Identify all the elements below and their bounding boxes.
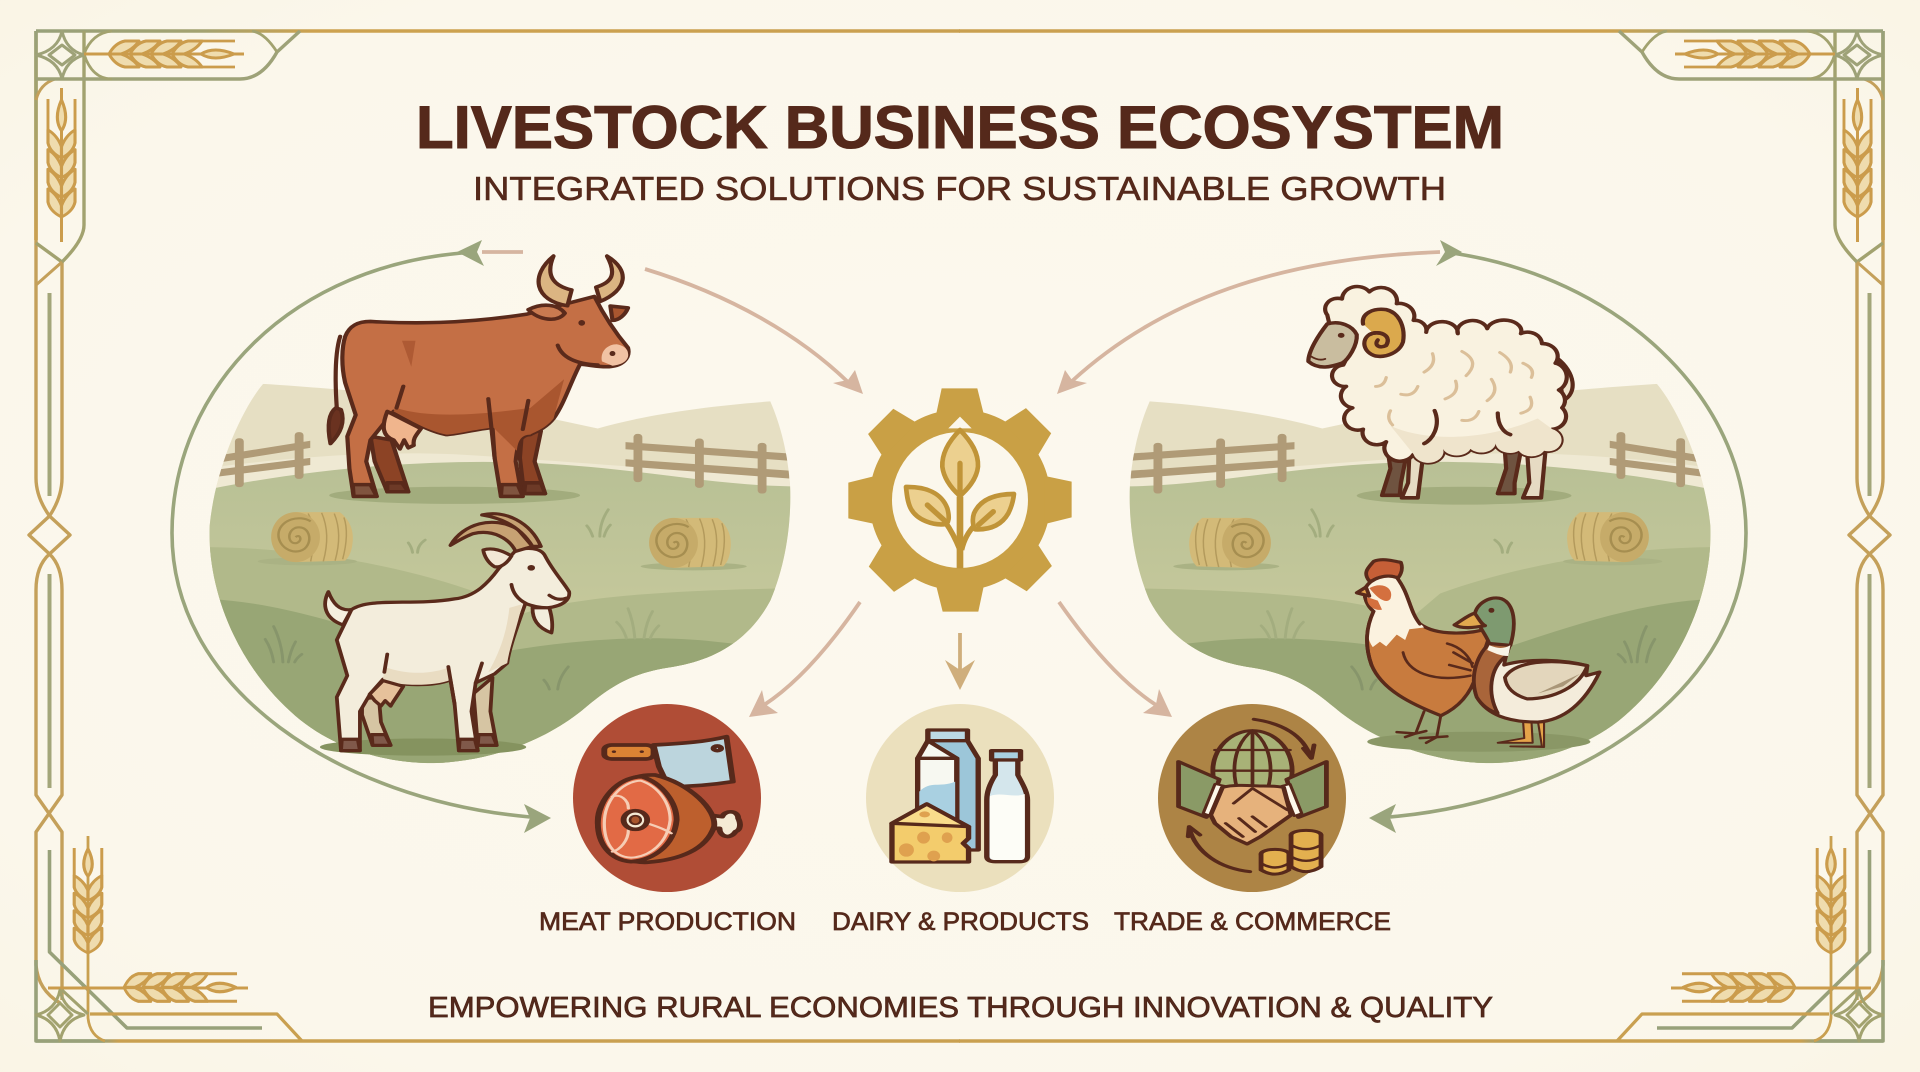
- label: meat production: MEAT PRODUCTION: [539, 908, 796, 936]
- arrow: hub to dairy: [945, 633, 975, 690]
- icon: meat production: [573, 704, 761, 892]
- panel: left pasture landscape: [202, 379, 800, 769]
- arrow: hub to sheep pasture: [1057, 252, 1440, 394]
- icon: cow: [329, 256, 629, 504]
- icon: goat: [320, 514, 569, 756]
- ornamental border: left half: [29, 31, 960, 1041]
- icon: dairy products: [866, 704, 1054, 892]
- arrow: short pink link to left loop: [482, 250, 523, 254]
- footer tagline: EMPOWERING RURAL ECONOMIES THROUGH INNOVATION & QUALITY: [428, 992, 1493, 1024]
- ornamental border: right half: [959, 31, 1890, 1041]
- arrow: hub to meat: [749, 602, 860, 717]
- arrow: cow pasture to hub: [645, 269, 863, 394]
- arrow: left green loop: [172, 240, 551, 833]
- icon: trade and commerce: [1158, 704, 1346, 892]
- subtitle: INTEGRATED SOLUTIONS FOR SUSTAINABLE GROWTH: [473, 170, 1446, 207]
- icon: duck: [1454, 598, 1600, 747]
- icon: central gear with sprout: [848, 388, 1072, 612]
- label: trade and commerce: TRADE & COMMERCE: [1114, 908, 1391, 936]
- label: dairy and products: DAIRY & PRODUCTS: [832, 908, 1089, 936]
- icon: sheep: [1308, 287, 1573, 505]
- arrow: right green loop: [1369, 240, 1746, 833]
- panel: right pasture landscape: [1120, 379, 1718, 769]
- title: LIVESTOCK BUSINESS ECOSYSTEM: [416, 94, 1504, 161]
- arrow: hub to trade: [1059, 602, 1172, 717]
- icon: chicken: [1357, 560, 1590, 752]
